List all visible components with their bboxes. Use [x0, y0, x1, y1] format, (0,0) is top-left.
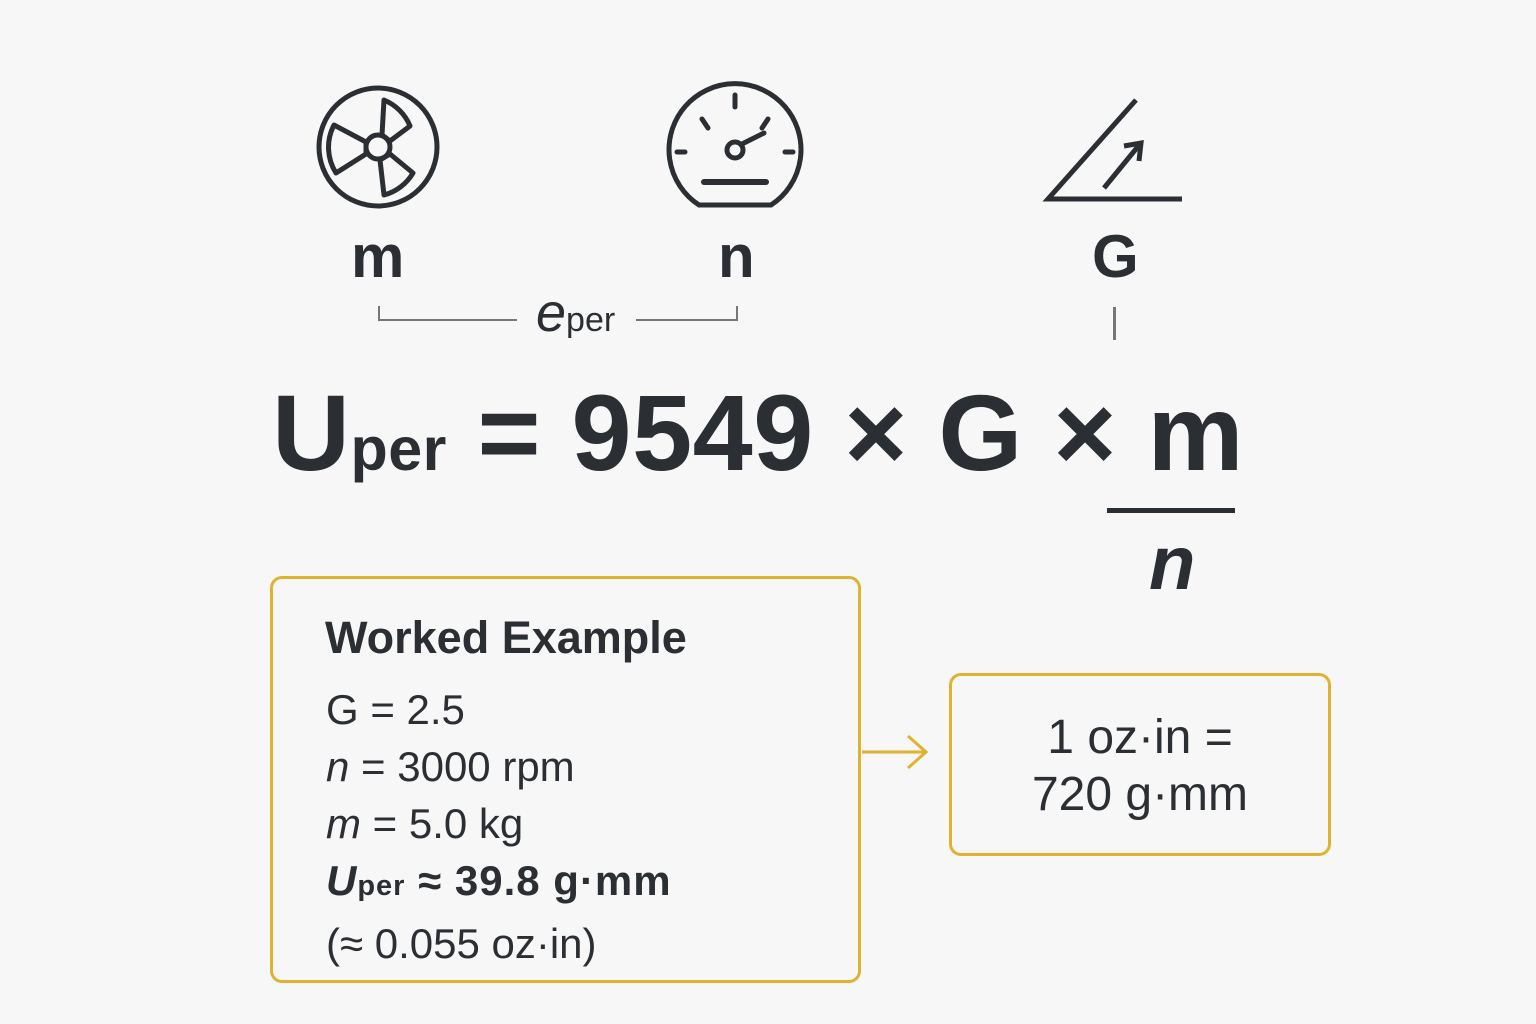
bracket e_per — [378, 283, 738, 343]
label G: G — [1092, 223, 1139, 290]
values: (≈ 0.055 oz·in) — [326, 920, 596, 967]
label n: n — [718, 223, 755, 290]
values: Uper ≈ 39.8 g·mm — [326, 857, 672, 904]
icon: fan — [316, 86, 440, 208]
values — [326, 686, 672, 967]
panel: worked example — [270, 576, 861, 983]
icon: gauge — [666, 81, 804, 208]
heading: Worked Example — [325, 612, 687, 663]
icon: slope gradient — [1042, 98, 1182, 202]
label m: m — [351, 223, 404, 290]
main formula: Uper = 9549 × G × m — [272, 372, 1244, 493]
panel: conversion — [949, 673, 1331, 856]
text: n — [1149, 521, 1195, 606]
panel: conversion: 720 g·mm — [1032, 768, 1248, 821]
arrow — [862, 735, 928, 769]
values: G = 2.5 — [326, 686, 465, 733]
values: m = 5.0 kg — [326, 800, 523, 847]
fraction line & denominator n — [1107, 508, 1235, 513]
G tick — [1113, 307, 1116, 340]
values: n = 3000 rpm — [326, 743, 575, 790]
bracket e_per: eper — [536, 283, 615, 343]
panel: conversion: 1 oz·in = — [1047, 711, 1233, 764]
